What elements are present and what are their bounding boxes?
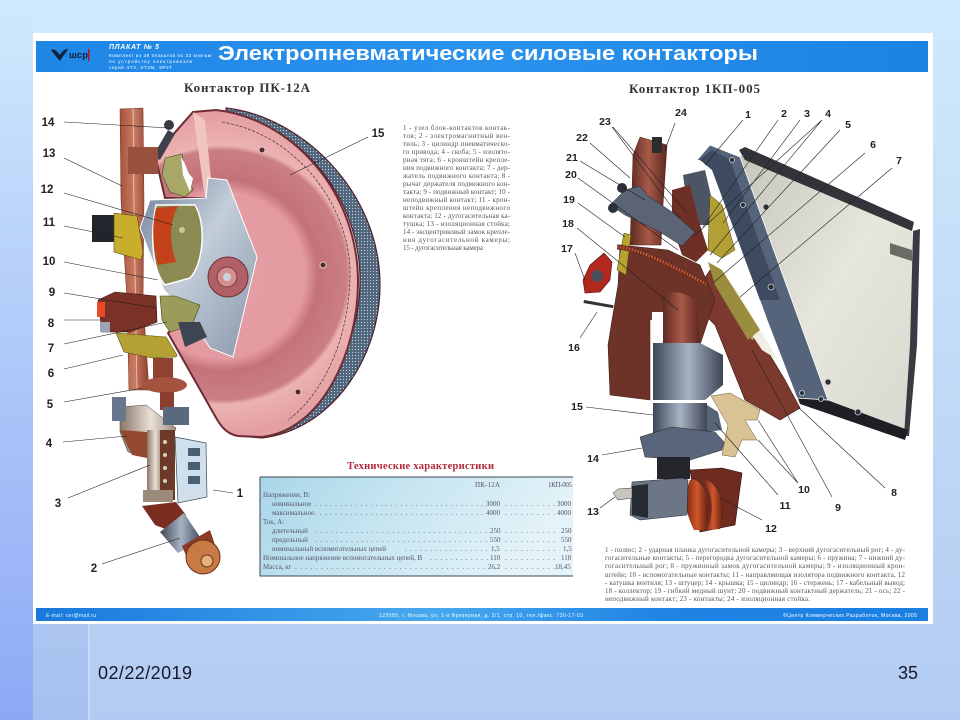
valve block bbox=[630, 478, 688, 520]
callouts: left contactor: 12 bbox=[41, 184, 53, 196]
slide date: 02/22/2019 bbox=[98, 663, 192, 683]
poster subtitle: серий ЭТ2, ЭТ2М, ЭР2Т bbox=[109, 64, 172, 70]
callouts: right contactor: 24 bbox=[675, 107, 687, 119]
callouts: right contactor: 3 bbox=[804, 108, 810, 120]
arc chute disc bbox=[155, 110, 358, 437]
table: specifications: 550 bbox=[561, 536, 572, 544]
callouts: left contactor: 5 bbox=[47, 399, 54, 411]
legend: left contactor: 15 - дугогасительная камера bbox=[403, 244, 484, 252]
callouts: left contactor: 13 bbox=[43, 148, 55, 160]
legend: left contactor: ния дугогасительной камеры; bbox=[403, 236, 510, 244]
table: specifications: 4000 bbox=[557, 509, 572, 517]
title: Электропневматические силовые контакторы bbox=[218, 42, 758, 65]
callouts: right contactor: 2 bbox=[781, 108, 787, 120]
callouts: right contactor: 8 bbox=[891, 487, 897, 499]
slide number: 35 bbox=[898, 663, 918, 683]
table: specifications: . . . . . . . . . . . . . . . . . . . . . . . . . . . . . . . . . . . . . bbox=[295, 563, 485, 571]
legend: right contactor bbox=[605, 546, 906, 603]
chute dark parts bbox=[683, 170, 712, 225]
callouts: right contactor: 13 bbox=[587, 506, 599, 518]
column bbox=[630, 137, 667, 245]
table: specifications: . . . . . . . . . . bbox=[505, 554, 555, 562]
poster bbox=[33, 33, 933, 624]
spring shunt bbox=[617, 247, 706, 284]
callouts: right contactor: 7 bbox=[896, 155, 902, 167]
legend: right contactor: штейн; 10 - вспомогательные контакты; 11 - направляющая изолятора подвижного контакта, 12 bbox=[605, 571, 906, 579]
legend: right contactor: 18 - коллектор; 19 - гибкий медный шунт; 20 - подвижный контактный держатель; 21 - ось; 22 - bbox=[605, 587, 906, 595]
valve cylinder bbox=[142, 502, 186, 530]
table: specifications: . . . . . . . . . . bbox=[505, 509, 555, 517]
top rail bbox=[739, 147, 914, 231]
callouts: right contactor: 5 bbox=[845, 119, 851, 131]
white window bbox=[652, 312, 663, 342]
table: specifications: . . . . . . . . . . . . . . . . . . . . . . . . . . . . . . . . . . bbox=[315, 509, 483, 517]
callouts: left contactor: 9 bbox=[49, 287, 55, 299]
table: specifications: . . . . . . . . . . bbox=[505, 527, 555, 535]
bolts bbox=[259, 147, 326, 395]
table: specifications: 26,2 bbox=[488, 563, 501, 571]
grey bracket bbox=[610, 186, 695, 246]
callouts: left contactor: 4 bbox=[46, 438, 53, 450]
poster number: ПЛАКАТ № 5 bbox=[109, 44, 159, 51]
legend: left contactor: тиль; 3 - цилиндр пневматическо- bbox=[403, 140, 511, 148]
callouts: left contactor: 1 bbox=[237, 488, 244, 500]
table: specifications: Номинальное напряжение вспомогательных цепей, В bbox=[263, 554, 423, 562]
callouts: right contactor bbox=[561, 107, 902, 535]
callouts: right contactor: 10 bbox=[798, 484, 810, 496]
callouts: right contactor: 18 bbox=[562, 218, 574, 230]
legend: right contactor: - катушка вентиля; 13 - штуцер; 14 - крышка; 15 - цилиндр; 16 - стержень; 17 - кабельный вывод; bbox=[605, 579, 905, 587]
callouts: right contactor: 1 bbox=[745, 109, 751, 121]
legend: left contactor: тов; 2 - электромагнитный вен- bbox=[403, 132, 511, 140]
callouts: right contactor: 20 bbox=[565, 169, 577, 181]
table: specifications: максимальное bbox=[272, 509, 314, 517]
tube bbox=[663, 292, 700, 348]
footer address: 129085, г. Москва, ул. 1-я Фрезерная, д. 2/1, стр. 10, тел./факс: 730-17-03 bbox=[379, 613, 583, 619]
upper olive contact bbox=[162, 154, 193, 197]
legend: left contactor: тушка; 13 - изоляционная стойка; bbox=[403, 220, 510, 228]
callouts: right contactor: 15 bbox=[571, 401, 583, 413]
table: specifications: . . . . . . . . . . . . . . . . . bbox=[405, 545, 487, 553]
table: specifications: номинальный вспомогательных цепей bbox=[272, 545, 386, 553]
legend: left contactor: неподвижный контакт; 11 - крон- bbox=[403, 196, 511, 204]
callouts: right contactor: 21 bbox=[566, 152, 578, 164]
olive lower contact bbox=[160, 296, 200, 332]
silver block bbox=[653, 343, 723, 400]
icon: logo: шср bbox=[69, 50, 88, 61]
callouts: left contactor: 7 bbox=[48, 343, 54, 355]
poster subtitle bbox=[109, 53, 211, 70]
table: specifications: предельный bbox=[272, 536, 308, 544]
poster subtitle: по устройству электровозов bbox=[109, 58, 193, 64]
callouts: left contactor: 10 bbox=[43, 256, 55, 268]
arm bbox=[690, 270, 800, 420]
table: specifications: Ток, А: bbox=[263, 518, 284, 526]
table: specifications: 1,5 bbox=[491, 545, 500, 553]
legend: left contactor: такта; 9 - подвижный контакт; 10 - bbox=[403, 188, 511, 196]
callouts: right contactor: 19 bbox=[563, 194, 575, 206]
nozzle bbox=[613, 488, 632, 500]
upper brown bbox=[672, 185, 708, 262]
table: specifications: . . . . . . . . . . bbox=[505, 536, 555, 544]
callouts: left contactor: 8 bbox=[48, 318, 55, 330]
footer copyright: ©Центр Коммерческих Разработок, Москва, 2005 bbox=[783, 612, 917, 619]
legend: left contactor: контакта; 12 - дугогасительная ка- bbox=[403, 212, 511, 220]
heading: right contactor: Контактор 1КП-005 bbox=[629, 81, 760, 96]
table: specifications: . . . . . . . . . . . . . . . . . . . . . . . . . . . . . . . . . . bbox=[315, 527, 487, 535]
callouts: right contactor: 6 bbox=[870, 139, 876, 151]
silver plate bbox=[140, 178, 257, 357]
callouts: left contactor: 14 bbox=[42, 117, 55, 129]
legend: right contactor: гогасительные контакты; 5 - перегородка дугогасительной камеры; 6 - пружина; 7 - нижний ду- bbox=[605, 554, 906, 562]
main body bbox=[608, 245, 715, 400]
table: specifications: 18,45 bbox=[555, 563, 571, 571]
legend: left contactor: жатель подвижного контакта; 8 - bbox=[402, 172, 511, 180]
legend: right contactor: 1 - полюс; 2 - ударная планка дугогасительной камеры; 3 - верхний дугогасительный рог; 4 - ду- bbox=[605, 546, 906, 554]
icon: logo bbox=[51, 49, 90, 61]
cream piece bbox=[711, 393, 760, 457]
dark strip bbox=[697, 145, 828, 400]
callouts: right contactor: 17 bbox=[561, 243, 573, 255]
legend: left contactor: 14 - эксцентриковый замок крепле- bbox=[403, 228, 511, 236]
callouts: right contactor: 16 bbox=[568, 342, 580, 354]
table: specifications: ПК-12А bbox=[475, 481, 500, 489]
table: specifications: Масса, кг bbox=[263, 563, 292, 571]
yellow bracket 6 bbox=[116, 333, 177, 358]
insulator bbox=[153, 358, 173, 380]
callouts: left contactor: 11 bbox=[43, 217, 56, 229]
table: specifications: 110 bbox=[490, 554, 501, 562]
table: specifications: 3000 bbox=[557, 500, 572, 508]
table: specifications: длительный bbox=[272, 527, 308, 535]
cylinder bbox=[653, 403, 707, 433]
table: specifications: . . . . . . . . . . . . bbox=[430, 554, 488, 562]
heading: left contactor: Контактор ПК-12А bbox=[184, 80, 311, 95]
tab bbox=[890, 243, 912, 261]
flange bbox=[640, 427, 724, 460]
yellow bracket 11 bbox=[92, 215, 114, 242]
illustration: contactor 1KP-005 bbox=[583, 137, 920, 532]
coil bbox=[690, 468, 742, 532]
callouts: right contactor: 23 bbox=[599, 116, 611, 128]
main coil bbox=[153, 205, 202, 285]
callouts: left contactor: 3 bbox=[55, 498, 61, 510]
right rail bbox=[904, 229, 920, 436]
legend: right contactor: неподвижный контакт; 23 - контакты; 24 - изоляционная стойка. bbox=[605, 595, 810, 603]
olive bar bbox=[617, 233, 631, 275]
legend: right contactor: гогасительный рог; 8 - пружинный замок дугогасительной камеры; 9 - изоляционный крон- bbox=[605, 562, 906, 570]
callouts: right contactor: 22 bbox=[576, 132, 588, 144]
legend: left contactor bbox=[402, 124, 511, 252]
table: specifications: 250 bbox=[490, 527, 501, 535]
table: specifications: 3000 bbox=[486, 500, 500, 508]
table: specifications bbox=[260, 477, 573, 576]
callouts: left contactor: 15 bbox=[372, 128, 385, 140]
table: specifications: 4000 bbox=[486, 509, 500, 517]
callouts: right contactor: 14 bbox=[587, 453, 599, 465]
table: specifications: . . . . . . . . . . . . . . . . . . . . . . . . . . . . . . . . . . bbox=[315, 536, 487, 544]
callouts: right contactor: 11 bbox=[779, 500, 791, 512]
lower block bbox=[120, 405, 176, 457]
table: specifications: . . . . . . . . . . bbox=[505, 500, 555, 508]
red contact block bbox=[98, 292, 157, 332]
table: specifications: . . . . . . . . . . . . . . . . . . . . . . . . . . . . . . . . . . bbox=[315, 500, 483, 508]
illustration: contactor PK-12A bbox=[92, 108, 380, 574]
hub bbox=[208, 257, 248, 297]
callouts: right contactor: 12 bbox=[765, 523, 777, 535]
table: specifications: 1,5 bbox=[563, 545, 572, 553]
callouts: left contactor bbox=[41, 117, 385, 575]
table: specifications: 550 bbox=[490, 536, 501, 544]
legend: left contactor: рная тяга; 6 - кронштейн крепле- bbox=[403, 156, 511, 164]
callouts: left contactor: 2 bbox=[91, 563, 97, 575]
table: specifications: номинальное bbox=[272, 500, 311, 508]
callouts: right contactor: 9 bbox=[835, 502, 841, 514]
table: specifications: . . . . . . . . . . bbox=[505, 545, 555, 553]
footer email: E-mail: cer@mail.ru bbox=[46, 613, 96, 619]
bottom rail bbox=[797, 396, 908, 440]
table: specifications: 110 bbox=[561, 554, 572, 562]
table: specifications: 250 bbox=[561, 527, 572, 535]
column bbox=[120, 108, 149, 390]
legend: left contactor: го привода; 4 - скоба; 5 - изолято- bbox=[403, 148, 511, 156]
footer bar bbox=[36, 608, 928, 621]
legend: left contactor: 1 - узел блок-контактов контак- bbox=[403, 124, 511, 132]
table: specifications: . . . . . . . . . . bbox=[505, 563, 555, 571]
legend: left contactor: ния подвижного контакта; 7 - дер- bbox=[403, 164, 511, 172]
poster subtitle: Комплект из 38 плакатов по 33 книгам bbox=[109, 53, 211, 58]
legend: left contactor: рычаг держателя подвижного кон- bbox=[403, 180, 511, 188]
arc chute band bbox=[226, 108, 380, 438]
header bar bbox=[36, 41, 928, 72]
dark neck bbox=[657, 457, 690, 479]
heading: technical specs: Технические характеристики bbox=[347, 461, 494, 472]
callouts: left contactor: 6 bbox=[48, 368, 54, 380]
table: specifications: Напряжение, В: bbox=[263, 491, 310, 499]
back plate bbox=[740, 155, 915, 436]
terminal bbox=[583, 253, 612, 293]
callouts: right contactor: 4 bbox=[825, 108, 831, 120]
legend: left contactor: штейн крепления неподвижного bbox=[403, 204, 510, 212]
table: specifications: 1КП-005 bbox=[548, 481, 572, 489]
